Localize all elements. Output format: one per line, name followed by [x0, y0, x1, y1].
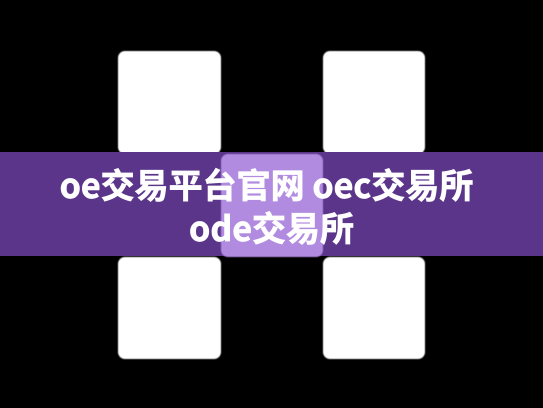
title line 1: oe交易平台官网 oec交易所 [60, 159, 473, 208]
panel: purple title band [0, 152, 543, 256]
title [60, 159, 473, 251]
panel: top-right white tile [323, 51, 425, 154]
title line 2: ode交易所 [189, 202, 354, 251]
panel: bottom-left white tile [118, 257, 220, 359]
panel: bottom-right white tile [323, 257, 425, 359]
panel: centre light purple tile [220, 154, 323, 256]
panel: top-left white tile [118, 51, 220, 154]
